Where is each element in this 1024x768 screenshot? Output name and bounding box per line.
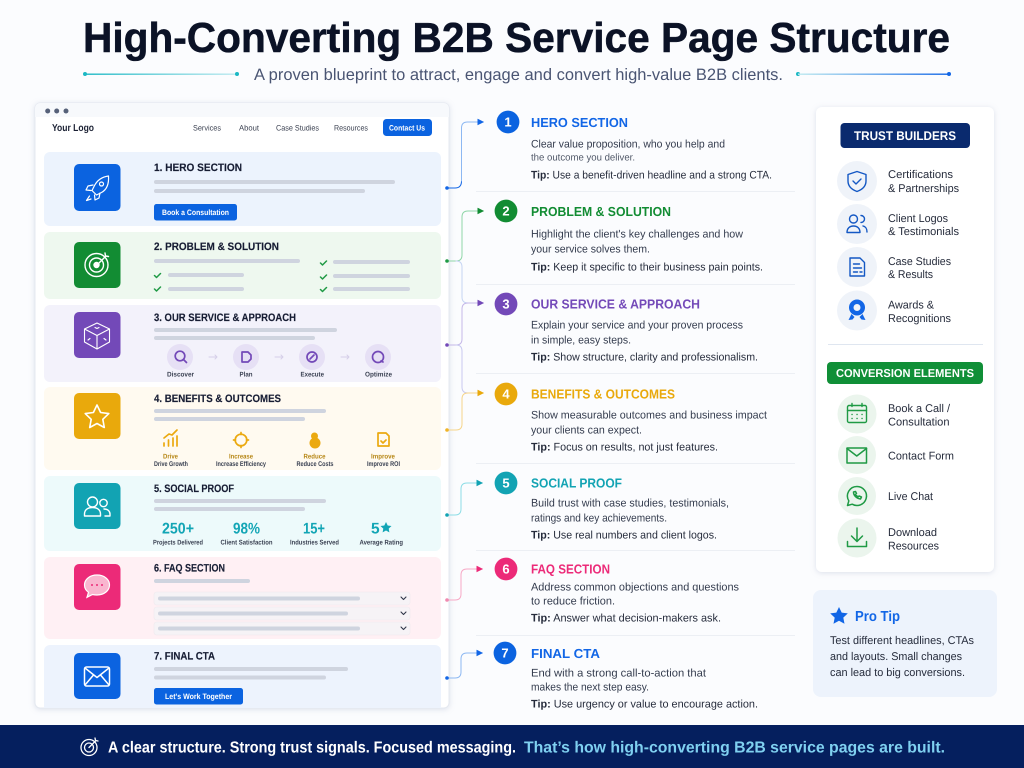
section 2: problem and solution: 2. PROBLEM & SOLUTION xyxy=(154,241,279,253)
step 1: hero section: Tip: Use a benefit-driven headline and a strong CTA. xyxy=(531,170,772,182)
step 1: hero section: the outcome you deliver. xyxy=(531,152,635,164)
icon: chat bubble xyxy=(84,575,110,597)
step 6: faq section: FAQ SECTION xyxy=(531,562,610,576)
trust item: client logos: & Testimonials xyxy=(888,226,959,238)
footer banner: That’s how high-converting B2B service pages are built. xyxy=(524,740,945,756)
nav bar: Services xyxy=(193,124,221,132)
step 1: hero section xyxy=(497,111,772,182)
nav bar: Case Studies xyxy=(276,124,319,132)
callout: pro tip: Test different headlines, CTAs xyxy=(830,635,974,647)
section 7: final cta xyxy=(44,645,441,708)
step 2: problem and solution xyxy=(495,200,763,274)
trust item: case studies xyxy=(837,247,951,287)
step 2: problem and solution: Tip: Keep it specific to their business pain points. xyxy=(531,262,763,274)
trust item: client logos: Client Logos xyxy=(888,213,948,225)
nav bar: Your Logo xyxy=(52,123,94,134)
connector arrows xyxy=(445,120,483,680)
callout: pro tip xyxy=(813,590,997,697)
section 1: hero: 1. HERO SECTION xyxy=(154,162,242,174)
conversion item: download xyxy=(838,518,939,558)
benefit icons xyxy=(164,430,389,448)
subtitle: A proven blueprint to attract, engage and convert high-value B2B clients. xyxy=(254,66,783,84)
subtitle xyxy=(83,66,951,84)
step 5: social proof: SOCIAL PROOF xyxy=(531,476,622,490)
step 3: our service and approach: in simple, easy steps. xyxy=(531,334,631,346)
conversion item: live chat: Live Chat xyxy=(888,491,934,503)
title: High-Converting B2B Service Page Structure xyxy=(83,14,950,61)
trust item: certifications: & Partnerships xyxy=(888,183,959,195)
step 4: benefits and outcomes: BENEFITS & OUTCOMES xyxy=(531,386,675,402)
trust item: awards: Recognitions xyxy=(888,313,951,325)
step 7: final cta: Tip: Use urgency or value to encourage action. xyxy=(531,698,758,710)
faq accordion xyxy=(154,592,410,635)
benefit labels xyxy=(154,454,400,468)
process steps: Execute xyxy=(300,372,324,378)
heading: trust builders xyxy=(840,123,970,148)
section 6: faq xyxy=(44,557,441,639)
step 6: faq section: Tip: Answer what decision-makers ask. xyxy=(531,612,721,624)
callout: pro tip: Pro Tip xyxy=(855,609,900,625)
section 5: social proof: 5. SOCIAL PROOF xyxy=(154,483,234,495)
button xyxy=(154,204,237,220)
step 1: hero section: HERO SECTION xyxy=(531,115,628,130)
step 1: hero section: Clear value proposition, who you help and xyxy=(531,138,725,150)
conversion item: download: Download xyxy=(888,527,937,539)
icon: rocket xyxy=(86,176,109,200)
benefit labels: Improve xyxy=(371,454,395,460)
process steps: Discover xyxy=(167,372,194,378)
footer banner: A clear structure. Strong trust signals. Focused messaging. xyxy=(108,740,516,756)
checklist xyxy=(154,260,410,292)
icon: target xyxy=(81,738,98,756)
stats: 250+ xyxy=(162,520,194,538)
conversion item: book a call xyxy=(838,394,951,434)
heading: conversion elements: CONVERSION ELEMENTS xyxy=(836,368,974,380)
section 6: faq: 6. FAQ SECTION xyxy=(154,562,225,574)
conversion item: live chat xyxy=(838,477,934,515)
process steps: Optimize xyxy=(365,372,392,378)
icon: star xyxy=(85,405,109,428)
benefit labels: Increase Efficiency xyxy=(216,461,266,468)
trust item: certifications: Certifications xyxy=(888,169,953,181)
step 4: benefits and outcomes: Show measurable outcomes and business impact xyxy=(531,410,767,422)
conversion item: contact form xyxy=(838,436,954,474)
step 6: faq section: 6 xyxy=(502,562,510,576)
benefit labels: Drive Growth xyxy=(154,461,188,468)
section 4: benefits and outcomes: 4. BENEFITS & OUTCOMES xyxy=(154,393,281,405)
stats xyxy=(153,520,403,546)
icon: envelope xyxy=(84,667,110,686)
trust item: client logos xyxy=(837,204,959,244)
step 6: faq section: Address common objections and questions xyxy=(531,582,739,594)
button: Book a Consultation xyxy=(162,208,229,217)
trust item: certifications xyxy=(837,161,959,201)
nav bar: About xyxy=(239,124,260,132)
process steps: Plan xyxy=(240,372,252,378)
button: Let's Work Together xyxy=(165,692,232,701)
step 5: social proof xyxy=(495,472,729,542)
callout: pro tip: and layouts. Small changes xyxy=(830,651,962,663)
step 6: faq section: to reduce friction. xyxy=(531,596,615,608)
step 5: social proof: Tip: Use real numbers and client logos. xyxy=(531,530,717,542)
benefit labels: Reduce Costs xyxy=(296,461,334,468)
icon: people xyxy=(84,497,110,516)
section 4: benefits and outcomes xyxy=(44,387,441,470)
step 4: benefits and outcomes: Tip: Focus on results, not just features. xyxy=(531,442,718,454)
step 5: social proof: Build trust with case studies, testimonials, xyxy=(531,498,729,510)
panel: browser mockup xyxy=(35,103,449,708)
icon: cube xyxy=(84,323,110,349)
panel: sidebar xyxy=(816,107,994,572)
step 3: our service and approach: OUR SERVICE & APPROACH xyxy=(531,296,700,312)
nav bar xyxy=(52,119,432,136)
section 5: social proof xyxy=(44,476,441,551)
step 3: our service and approach: Explain your service and your proven process xyxy=(531,320,743,332)
step 6: faq section xyxy=(495,558,739,624)
section 1: hero xyxy=(44,152,441,226)
benefit labels: Increase xyxy=(229,454,253,460)
conversion item: contact form: Contact Form xyxy=(888,450,954,462)
stats: Industries Served xyxy=(290,540,339,546)
process steps xyxy=(167,344,392,378)
icon: target xyxy=(85,253,108,276)
step 2: problem and solution: PROBLEM & SOLUTION xyxy=(531,204,671,219)
benefit labels: Drive xyxy=(163,454,178,460)
section 7: final cta: 7. FINAL CTA xyxy=(154,650,215,662)
step 4: benefits and outcomes xyxy=(495,383,767,454)
section 3: service and approach xyxy=(44,305,441,382)
stats: Average Rating xyxy=(360,540,403,546)
step 7: final cta: 7 xyxy=(501,646,509,660)
trust item: awards xyxy=(837,290,951,330)
stats: 15+ xyxy=(303,520,325,538)
step 2: problem and solution: 2 xyxy=(502,204,510,218)
conversion item: book a call: Book a Call / xyxy=(888,403,951,415)
conversion item: download: Resources xyxy=(888,540,939,552)
step 5: social proof: 5 xyxy=(502,476,510,490)
stats: Client Satisfaction xyxy=(220,540,272,546)
stats: Projects Delivered xyxy=(153,540,203,546)
heading: conversion elements xyxy=(827,362,983,384)
step 4: benefits and outcomes: 4 xyxy=(502,386,510,402)
step 7: final cta: End with a strong call-to-action that xyxy=(531,668,706,680)
heading: trust builders: TRUST BUILDERS xyxy=(854,129,956,143)
stats: 98% xyxy=(233,520,260,538)
step 5: social proof: ratings and key achievements. xyxy=(531,512,667,524)
stats: 5 xyxy=(371,520,380,538)
section 3: service and approach: 3. OUR SERVICE & APPROACH xyxy=(154,312,296,324)
step 3: our service and approach xyxy=(495,293,758,364)
step 7: final cta: FINAL CTA xyxy=(531,646,601,661)
benefit labels: Improve ROI xyxy=(367,461,400,468)
step 7: final cta xyxy=(494,642,758,710)
nav bar: Resources xyxy=(334,124,368,132)
step 7: final cta: makes the next step easy. xyxy=(531,682,649,694)
step 2: problem and solution: Highlight the client's key challenges and how xyxy=(531,228,743,240)
footer banner xyxy=(0,725,1024,768)
trust item: case studies: Case Studies xyxy=(888,256,951,268)
section 2: problem and solution xyxy=(44,232,441,299)
callout: pro tip: can lead to big conversions. xyxy=(830,667,965,679)
trust item: case studies: & Results xyxy=(888,269,933,281)
step 4: benefits and outcomes: your clients can expect. xyxy=(531,424,642,436)
nav bar: Contact Us xyxy=(389,124,426,132)
benefit labels: Reduce xyxy=(304,454,326,460)
step 2: problem and solution: your service solves them. xyxy=(531,244,650,256)
conversion item: book a call: Consultation xyxy=(888,416,950,428)
step 1: hero section: 1 xyxy=(504,114,512,130)
trust item: awards: Awards & xyxy=(888,300,935,312)
button xyxy=(154,688,243,704)
window dots xyxy=(45,108,68,114)
step 3: our service and approach: Tip: Show structure, clarity and professionalism. xyxy=(531,352,758,364)
step 3: our service and approach: 3 xyxy=(502,296,510,312)
